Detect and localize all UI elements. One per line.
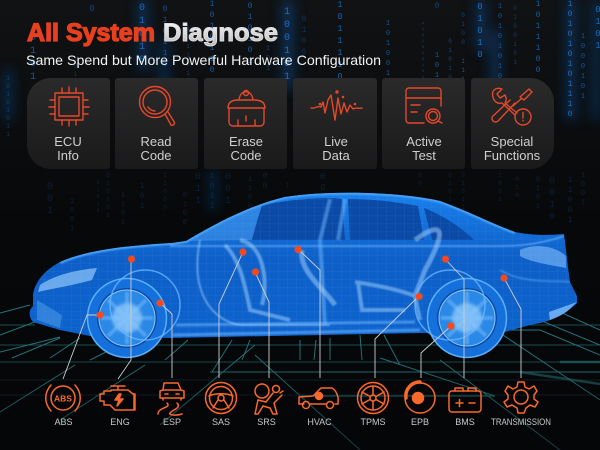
faint digits behind car: 010101 [104,172,112,220]
system: TRANSMISSION: TRANSMISSION [491,417,551,427]
icon: ABS warning: ABS [54,394,72,404]
matrix digits: 10111100 [335,0,345,96]
panel: Live Data: Live [324,134,348,149]
system: TRANSMISSION [491,382,551,427]
matrix digits: 1000101 [579,33,587,103]
faint digits behind car: 1101 [119,192,127,228]
matrix digits: 100101 [282,7,292,85]
matrix digits: 10110 [72,55,78,95]
icon: chip [49,87,89,126]
system: SAS: SAS [212,417,230,427]
matrix digits: 0101 [264,35,272,75]
icon: car with fan [299,388,338,408]
matrix digits: 010101 [246,2,254,68]
faint digits behind car: 11000 [162,172,168,212]
icon: magnifier [140,86,175,125]
panel: Live Data [293,78,377,169]
system: HVAC: HVAC [307,417,332,427]
system: ESP: ESP [163,417,181,427]
system: EPB: EPB [411,417,429,427]
matrix digits: 01010 [475,2,485,62]
panel: Active Test [382,78,465,169]
seats [197,230,439,325]
system: TPMS: TPMS [360,417,386,427]
panel: Read Code: Code [140,148,172,163]
panel: Live Data: Data [322,148,350,163]
matrix digits: 1110 [460,58,466,94]
title: Diagnose [163,19,278,47]
icon: engine [100,386,135,410]
matrix digits: 101 [433,52,441,82]
system: BMS [449,388,481,427]
matrix digits [4,0,600,139]
panel: Special Functions [471,78,554,169]
icon: test screen [406,88,442,123]
matrix digits: 0 [432,2,442,11]
icon: battery [449,388,481,412]
panel: Erase Code: Erase [229,134,263,149]
faint digits behind car: 00 [260,172,270,192]
car illustration [0,190,600,358]
system: HVAC [299,388,338,427]
title [27,19,278,47]
system: SRS [255,384,283,427]
faint digits behind car: 001 [44,182,56,218]
system: ABS [46,385,80,427]
matrix digits: 01010 [446,38,454,83]
panel: Active Test: Active [406,134,442,149]
car body [30,193,577,338]
subtitle: Same Spend but More Powerful Hardware Configuration [26,52,381,68]
faint digits behind car [44,172,587,234]
leader lines [63,249,521,379]
matrix digits: 0101010101 [421,22,425,82]
panel: Read Code [115,78,198,169]
matrix digits: 101010101110 [566,0,574,120]
matrix digits: 1010010 [384,20,392,90]
matrix digits: 10101010 [496,3,504,83]
matrix digits: 1011100 [534,0,542,77]
system: ESP [158,383,184,427]
rear wheel [415,270,506,358]
panel: Special Functions: Special [491,134,533,149]
floor grid [0,305,600,450]
panel: ECU Info: Info [57,148,79,163]
faint digits behind car: 1011 [208,172,216,212]
faint digits behind car: 0101 [446,172,454,204]
taillight [520,246,566,268]
system: TPMS [358,382,388,427]
matrix digits: 0100 [300,15,308,59]
faint digits behind car: 1 [284,182,290,190]
panel: Read Code: Read [140,134,172,149]
faint digits behind car: 1001 [68,198,76,234]
headlight [38,268,97,292]
panel: Active Test: Test [412,148,436,163]
system: ENG [100,386,135,427]
car windows [250,198,474,240]
matrix digits: 0101 [28,33,38,85]
icon: tire [358,382,388,414]
marker dots [97,246,507,329]
matrix digits: 0100 [460,12,466,48]
faint digits behind car: 001 [222,172,234,208]
icon: brush [228,90,265,126]
front wheel [88,270,180,358]
icon: airbag [255,384,283,414]
faint digits behind car: 010 [514,176,520,200]
matrix digits: 0100101 [512,5,518,68]
icon: brake disc [405,382,435,413]
matrix digits: 0 [87,4,97,14]
faint digits behind car: 1001 [579,172,587,208]
faint digits behind car: 011 [192,172,204,208]
faint digits behind car: 1100 [246,176,254,212]
panel: ECU Info: ECU [54,134,82,149]
background glow streaks [4,0,600,210]
system: SAS [206,382,236,427]
icon: tools [492,88,532,125]
faint digits behind car: 01010 [95,180,101,215]
faint digits behind car: 01011 [460,172,466,212]
panel: ECU Info [27,78,110,169]
faint digits behind car: 101 [138,182,146,212]
title: All System [27,19,155,47]
icon: steering wheel [206,382,236,414]
matrix digits: 10101011 [4,75,12,139]
system: BMS: BMS [455,417,475,427]
matrix digits: 101101 [184,25,192,79]
system: ABS: ABS [54,417,73,427]
faint digits behind car: 11001 [566,176,574,226]
faint digits behind car: 0010 [546,176,558,224]
faint digits behind car: 0100 [181,192,189,228]
matrix digits: 010110 [160,5,170,71]
faint digits behind car: 00 [318,172,328,194]
matrix digits: 01010 [136,3,148,68]
panel: Erase Code [204,78,287,169]
faint digits behind car: 1001 [496,172,504,204]
panel: Erase Code: Code [230,148,262,163]
icon: waveform [311,91,362,120]
system: ENG: ENG [110,417,130,427]
faint digits behind car: 00 [416,172,424,188]
car highlights [60,193,570,335]
matrix digits: 1010110 [208,0,216,77]
panel: Special Functions: Functions [484,148,541,163]
system: SRS: SRS [257,417,276,427]
icon: skidding car [158,383,184,415]
system: EPB [405,382,435,427]
icon: gear [504,382,538,413]
faint digits behind car: 0101 [534,176,542,212]
